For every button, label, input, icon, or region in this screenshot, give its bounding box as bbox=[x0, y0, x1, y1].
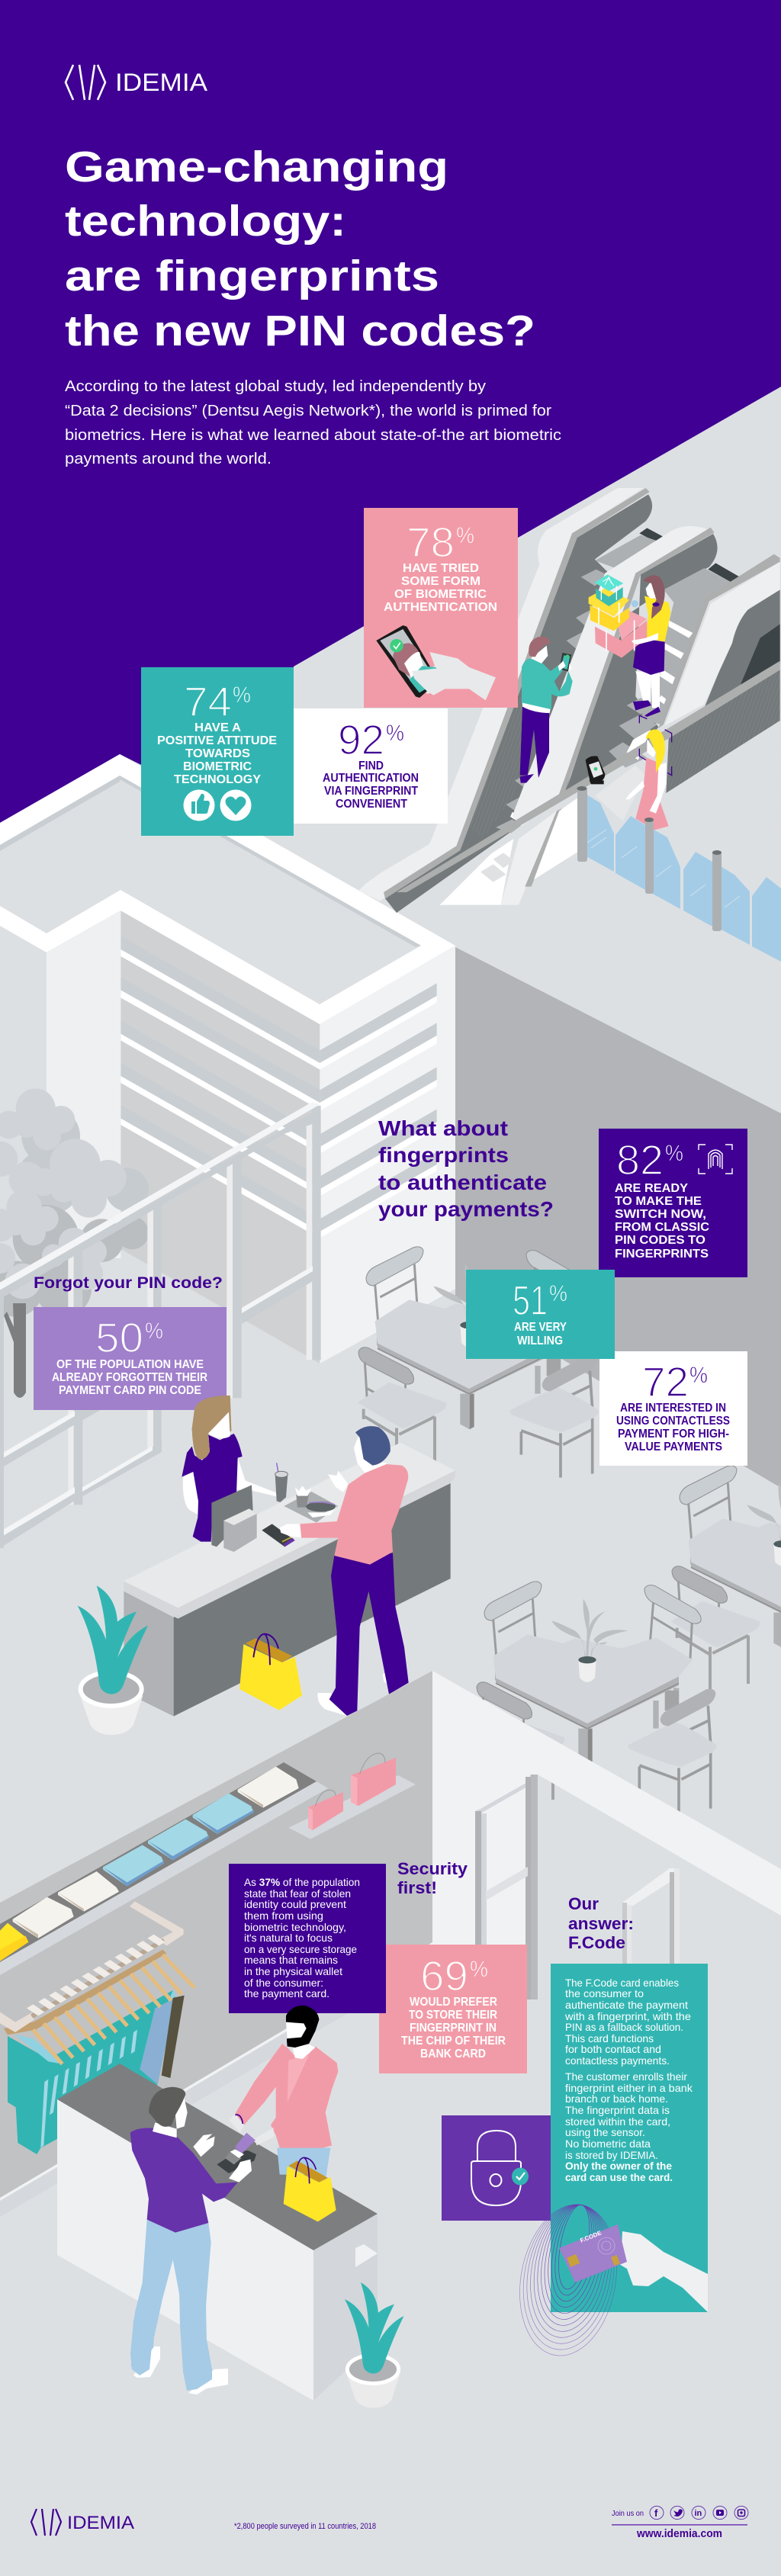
icon: linkedin bbox=[692, 2506, 705, 2520]
icon: fingerprint scan bbox=[699, 1145, 732, 1174]
tree trunk bbox=[4, 1303, 26, 1398]
teal plant in pot, lower bbox=[345, 2282, 404, 2407]
label: ARE VERY bbox=[514, 1321, 567, 1334]
intro paragraph: According to the latest global study, led independently by bbox=[65, 377, 487, 395]
stat: 78: 78 bbox=[407, 519, 455, 566]
top dark bars bbox=[639, 528, 740, 582]
label: VALUE PAYMENTS bbox=[625, 1441, 722, 1453]
label: BIOMETRIC bbox=[183, 760, 252, 773]
icon: facebook: f bbox=[654, 2507, 658, 2519]
teal gift box bbox=[596, 587, 623, 606]
panel: identity fear text: them from using bbox=[244, 1910, 323, 1922]
label: PAYMENT FOR HIGH- bbox=[618, 1428, 729, 1441]
panel: identity fear text: in the physical wallet bbox=[244, 1965, 342, 1977]
lower side panel bbox=[666, 670, 780, 793]
label: SWITCH NOW, bbox=[615, 1208, 706, 1221]
intro paragraph: biometrics. Here is what we learned about state-of-the art biometric bbox=[65, 426, 561, 444]
bag display shelf bbox=[288, 1753, 416, 1839]
illustration: hand holding F.Code card bbox=[559, 2224, 708, 2312]
label: FIND bbox=[358, 760, 384, 772]
card brand text: F.CODE bbox=[579, 2229, 603, 2244]
label bbox=[52, 1358, 207, 1397]
label: USING CONTACTLESS bbox=[616, 1415, 730, 1428]
label: ARE READY bbox=[615, 1182, 688, 1195]
folded clothes bbox=[0, 1767, 299, 1961]
label bbox=[157, 721, 277, 786]
panel: identity fear text bbox=[229, 1864, 386, 2013]
panel: 72% bbox=[599, 1351, 747, 1466]
left balustrade bbox=[358, 488, 643, 901]
long lower rail bbox=[397, 661, 780, 892]
purple header background bbox=[0, 0, 781, 831]
heading: what about fingerprints: What about bbox=[378, 1116, 508, 1140]
label bbox=[323, 760, 419, 811]
label: VIA FINGERPRINT bbox=[324, 785, 418, 798]
cashier hair over panel 50% bbox=[192, 1396, 231, 1460]
answer paragraph one: This card functions bbox=[565, 2032, 654, 2044]
card terminal bbox=[217, 2150, 256, 2173]
right escalator panel bbox=[564, 534, 718, 795]
roof bands bbox=[0, 754, 455, 947]
logo: IDEMIA top: IDEMIA bbox=[115, 69, 208, 96]
illustration: light wall with doors bbox=[432, 1671, 781, 1999]
food tray bbox=[284, 1486, 338, 1523]
panel: 92% bbox=[294, 708, 448, 824]
answer paragraph two bbox=[565, 2070, 693, 2183]
icon: facebook bbox=[650, 2506, 664, 2520]
label bbox=[514, 1321, 567, 1347]
stat: 51: 51 bbox=[513, 1277, 548, 1324]
tree bbox=[0, 1088, 149, 1317]
label: CONVENIENT bbox=[336, 798, 407, 811]
answer paragraph two: No biometric data bbox=[565, 2138, 651, 2150]
label: BANK CARD bbox=[420, 2048, 486, 2060]
panel: 50% bbox=[34, 1307, 227, 1410]
label: FROM CLASSIC bbox=[615, 1221, 709, 1234]
label bbox=[401, 1996, 506, 2060]
drink cup bbox=[275, 1463, 288, 1502]
stat: 92: 92 bbox=[338, 716, 384, 763]
panel: identity fear text: biometric technology, bbox=[244, 1921, 346, 1933]
right balustrade bbox=[704, 589, 780, 708]
answer paragraph one: with a fingerprint, with the bbox=[564, 2010, 691, 2022]
icon: thumbs up bbox=[183, 790, 215, 821]
footer logo: IDEMIA bbox=[67, 2513, 134, 2533]
website: www.idemia.com bbox=[636, 2528, 722, 2540]
percent sign: % bbox=[470, 1957, 488, 1982]
F.Code card bbox=[559, 2224, 627, 2282]
panel: 74% bbox=[141, 667, 294, 836]
icon: hand holding phone with face recognition bbox=[376, 625, 496, 700]
label: WILLING bbox=[517, 1335, 563, 1347]
label: TO MAKE THE bbox=[615, 1195, 702, 1208]
icon: youtube bbox=[713, 2506, 727, 2520]
hatch on escalator side bbox=[465, 681, 534, 839]
label: PAYMENT CARD PIN CODE bbox=[59, 1384, 201, 1397]
heading: our answer: Our bbox=[568, 1894, 599, 1913]
intro paragraph: “Data 2 decisions” (Dentsu Aegis Network*), the world is primed for bbox=[65, 402, 551, 419]
shop counter with seller and buyer bbox=[57, 2006, 378, 2401]
label: FINGERPRINT IN bbox=[410, 2022, 497, 2035]
percent sign: % bbox=[549, 1281, 567, 1306]
panel: 69% bbox=[379, 1945, 527, 2073]
heading: security first: first! bbox=[397, 1878, 437, 1897]
percent sign: % bbox=[456, 523, 474, 548]
counter front bbox=[57, 2099, 313, 2401]
percent sign: % bbox=[145, 1319, 163, 1344]
heading: security first bbox=[397, 1859, 468, 1897]
icon: check badge bbox=[512, 2167, 529, 2186]
answer paragraph one bbox=[564, 1977, 691, 2067]
intro paragraph bbox=[65, 377, 561, 467]
window frames bbox=[0, 1102, 321, 1505]
under-escalator white zone bbox=[440, 839, 513, 905]
title: the new PIN codes? bbox=[65, 307, 535, 355]
percent sign: % bbox=[689, 1363, 708, 1388]
percent sign: % bbox=[665, 1141, 683, 1166]
cashier bbox=[182, 1396, 281, 1542]
panel: 51% bbox=[466, 1270, 615, 1359]
payment terminal bbox=[262, 1524, 295, 1547]
title: technology: bbox=[65, 197, 346, 246]
intro paragraph: payments around the world. bbox=[65, 450, 272, 467]
counter side bbox=[313, 2214, 378, 2401]
label: SOME FORM bbox=[401, 575, 480, 588]
yellow gift box bbox=[590, 605, 629, 631]
footnote: *2,800 people surveyed in 11 countries, 2018 bbox=[234, 2522, 376, 2531]
label bbox=[616, 1402, 730, 1453]
answer paragraph two: The fingerprint data is bbox=[565, 2104, 670, 2116]
man in teal sweater bbox=[520, 637, 573, 783]
buyer lower legs and shoes bbox=[130, 2288, 228, 2395]
glass barrier bbox=[577, 786, 781, 962]
illustration: escalators with shoppers bbox=[358, 488, 780, 913]
seller hands and bag bbox=[217, 2114, 336, 2221]
fingerprint rings bbox=[509, 2197, 628, 2363]
heading: what about fingerprints: to authenticate bbox=[378, 1171, 547, 1194]
terminal floor shadow bbox=[595, 765, 646, 821]
label: ALREADY FORGOTTEN THEIR bbox=[52, 1371, 207, 1384]
big grey wall on right bbox=[455, 947, 781, 1488]
title bbox=[65, 143, 535, 355]
label: THE CHIP OF THEIR bbox=[401, 2035, 506, 2048]
answer paragraph two: Only the owner of the bbox=[565, 2160, 672, 2172]
percent sign: % bbox=[386, 721, 404, 746]
label: PIN CODES TO bbox=[615, 1234, 705, 1247]
answer paragraph one: The F.Code card enables bbox=[565, 1977, 679, 1989]
title: Game-changing bbox=[65, 143, 448, 191]
answer paragraph one: the consumer to bbox=[565, 1987, 644, 1999]
panel: F.Code answer bbox=[551, 1964, 708, 2312]
answer paragraph two: stored within the card, bbox=[565, 2115, 670, 2128]
illustration: grey shop wall with shelf bbox=[0, 1671, 432, 2401]
panel: 82% bbox=[599, 1129, 747, 1277]
yellow shopping bag bbox=[239, 1634, 302, 1710]
title: are fingerprints bbox=[65, 252, 439, 300]
left escalator inner panel bbox=[385, 494, 652, 913]
label: AUTHENTICATION bbox=[384, 601, 497, 614]
cafe table: right bbox=[670, 1466, 781, 1697]
answer paragraph two: card can use the card. bbox=[565, 2171, 673, 2183]
panel: identity fear text: means that remains bbox=[244, 1954, 338, 1966]
heading: our answer: answer: bbox=[568, 1914, 634, 1933]
label: HAVE A bbox=[194, 721, 241, 734]
panel: lock icon bbox=[442, 2115, 551, 2221]
answer paragraph one: contactless payments. bbox=[565, 2054, 670, 2067]
label: TOWARDS bbox=[185, 747, 250, 760]
right wall of building bbox=[320, 946, 455, 1363]
social links bbox=[612, 2506, 748, 2520]
answer paragraph one: authenticate the payment bbox=[565, 1999, 688, 2011]
footer logo bbox=[31, 2509, 134, 2536]
left wall of building bbox=[47, 911, 455, 1363]
heading: what about fingerprints: fingerprints bbox=[378, 1143, 509, 1167]
label: HAVE TRIED bbox=[403, 562, 479, 575]
percent sign: % bbox=[233, 683, 251, 708]
label: OF THE POPULATION HAVE bbox=[56, 1358, 204, 1371]
panel: identity fear text: the payment card. bbox=[244, 1987, 329, 1999]
stat: 69: 69 bbox=[420, 1952, 468, 1999]
label: TECHNOLOGY bbox=[174, 773, 261, 786]
label: TO STORE THEIR bbox=[409, 2009, 497, 2022]
baseboard bbox=[0, 1945, 432, 2217]
stat: 74: 74 bbox=[184, 678, 232, 725]
logo: IDEMIA top bbox=[66, 65, 208, 100]
label: AUTHENTICATION bbox=[323, 772, 419, 785]
cash register bbox=[211, 1485, 257, 1552]
label bbox=[384, 562, 497, 614]
answer paragraph one: for both contact and bbox=[565, 2043, 661, 2055]
pillar bbox=[47, 911, 121, 1258]
answer paragraph two: fingerprint either in a bank bbox=[565, 2082, 693, 2094]
seller head over panel bbox=[286, 2006, 319, 2048]
illustration: building exterior and tree bbox=[0, 754, 781, 1548]
panel: identity fear text: identity could prevent bbox=[244, 1898, 346, 1910]
middle balustrade bbox=[513, 526, 709, 826]
upper white wall band bbox=[0, 890, 455, 1024]
social links: Join us on bbox=[612, 2509, 644, 2518]
icon: heart bbox=[220, 790, 252, 821]
panel: identity fear text: state that fear of stolen bbox=[244, 1887, 351, 1900]
icon: twitter bbox=[670, 2506, 684, 2520]
answer paragraph two: is stored by IDEMIA. bbox=[565, 2149, 658, 2161]
escalator steps bbox=[496, 535, 731, 834]
heading: what about fingerprints: your payments? bbox=[378, 1197, 554, 1221]
icon: instagram bbox=[734, 2506, 748, 2520]
clothes rack bbox=[0, 1901, 194, 2154]
cafe table: upper bbox=[357, 1247, 599, 1478]
label bbox=[615, 1182, 709, 1261]
buyer bbox=[130, 2087, 252, 2366]
customer bbox=[280, 1426, 409, 1716]
woman carrying gift boxes bbox=[589, 574, 670, 717]
answer paragraph two: using the sensor. bbox=[565, 2126, 645, 2138]
stat: 82: 82 bbox=[616, 1136, 664, 1184]
panel: identity fear text: As 37% of the population bbox=[244, 1876, 360, 1888]
label: FINGERPRINTS bbox=[615, 1248, 709, 1261]
heading: our answer bbox=[568, 1894, 634, 1952]
panel: identity fear text: on a very secure storage bbox=[244, 1943, 357, 1955]
heading: forgot your PIN code: Forgot your PIN code? bbox=[34, 1274, 223, 1292]
icon: padlock bbox=[471, 2131, 521, 2205]
fingerprint terminal bbox=[586, 756, 605, 784]
answer paragraph two: branch or back home. bbox=[565, 2093, 668, 2105]
lower window rails bbox=[0, 1266, 313, 1548]
shelf bbox=[0, 1762, 328, 1975]
label: ARE INTERESTED IN bbox=[620, 1402, 726, 1415]
blonde woman scanned by fingerprint frame bbox=[625, 715, 672, 830]
counter top bbox=[57, 2064, 378, 2250]
label: OF BIOMETRIC bbox=[394, 588, 487, 601]
panel: identity fear text: of the consumer: bbox=[244, 1977, 323, 1989]
panel: identity fear text: it's natural to focus bbox=[244, 1932, 333, 1944]
teal plant in pot bbox=[78, 1585, 148, 1735]
label: WOULD PREFER bbox=[410, 1996, 497, 2009]
heading: what about fingerprints bbox=[378, 1116, 554, 1221]
cafe table: centre bbox=[475, 1582, 717, 1813]
stat: 50: 50 bbox=[95, 1314, 143, 1361]
pink gift box bbox=[595, 620, 647, 658]
seller bbox=[235, 2006, 338, 2181]
answer paragraph one: PIN as a fallback solution. bbox=[565, 2021, 683, 2033]
footer divider bbox=[612, 2524, 747, 2526]
illustration: checkout counter with customer and cashier bbox=[78, 1396, 455, 1735]
icon: linkedin: in bbox=[694, 2509, 702, 2518]
heading: security first: Security bbox=[397, 1859, 468, 1878]
label: POSITIVE ATTITUDE bbox=[157, 734, 277, 747]
answer paragraph two: The customer enrolls their bbox=[565, 2070, 687, 2083]
interior door frames bbox=[475, 1775, 680, 1999]
stat: 72: 72 bbox=[642, 1358, 689, 1405]
panel: 78% bbox=[364, 508, 518, 708]
counter bbox=[124, 1443, 455, 1717]
heading: our answer: F.Code bbox=[568, 1933, 625, 1952]
